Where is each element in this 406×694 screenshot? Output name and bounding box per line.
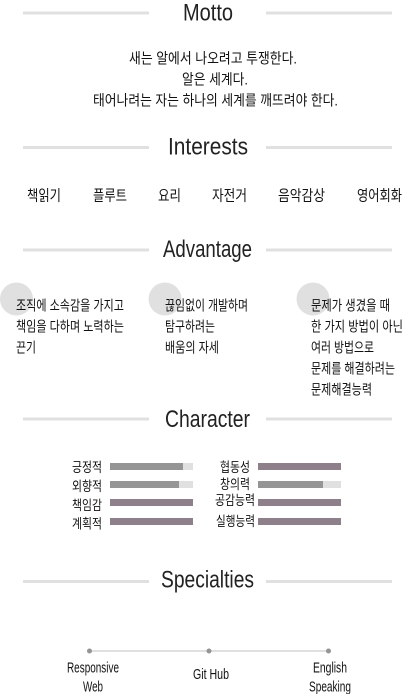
label: Responsive Web: Responsive (67, 660, 119, 676)
advantage item 2: 끊임없이 개발하며 (165, 298, 248, 314)
bar chart: right column: 실행능력 (216, 514, 255, 529)
advantage item 1: 끈기 (16, 340, 36, 356)
bar chart: left column: 책임감 (72, 498, 102, 513)
advantage item 1 (0, 282, 124, 356)
section: character (23, 406, 392, 532)
heading: Specialties: Specialties (161, 566, 254, 594)
list: interests: 플루트 (93, 188, 127, 204)
list: interests: 책읽기 (27, 188, 61, 204)
label: English Speaking: English (313, 660, 347, 676)
advantage item 1: 책임을 다하며 노력하는 (16, 318, 124, 334)
timeline: specialties (87, 648, 331, 654)
section: advantage (0, 236, 403, 398)
bar chart: left column: 긍정적 (72, 460, 102, 475)
advantage item 3: 여러 방법으로 (311, 340, 374, 356)
bar chart: left column: 외향적 (72, 479, 102, 494)
text block: motto quote (93, 50, 338, 110)
list: interests: 요리 (158, 188, 181, 204)
advantage item 1: 조직에 소속감을 가지고 (16, 298, 124, 314)
section: motto (23, 0, 392, 110)
bar chart: right column: 창의력 (220, 477, 250, 492)
text block: motto quote: 알은 세계다. (182, 72, 248, 88)
label: Git Hub: Git Hub (193, 667, 229, 683)
advantage item 3: 문제해결능력 (311, 382, 372, 398)
label: English Speaking (309, 660, 351, 694)
list: interests (27, 188, 402, 204)
text block: motto quote: 태어나려는 자는 하나의 세계를 깨뜨려야 한다. (93, 92, 338, 110)
advantage item 2: 배움의 자세 (165, 340, 219, 356)
heading: Character: Character (165, 406, 250, 433)
advantage item 2 (148, 282, 248, 356)
advantage item 3 (296, 282, 403, 398)
bar chart: left column: 계획적 (72, 516, 102, 532)
list: interests: 자전거 (212, 188, 247, 204)
section: specialties (23, 566, 392, 694)
list: interests: 음악감상 (278, 188, 325, 204)
bar chart: right column: 공감능력 (215, 493, 255, 508)
heading: Interests: Interests (168, 134, 248, 160)
text block: motto quote: 새는 알에서 나오려고 투쟁한다. (129, 50, 297, 68)
heading: Motto: Motto (183, 0, 233, 26)
advantage item 2: 탐구하려는 (165, 318, 215, 334)
bar chart: left column (72, 460, 193, 532)
bar chart: right column: 협동성 (220, 460, 250, 475)
label: Responsive Web (67, 660, 119, 694)
section: interests (23, 134, 402, 204)
heading: Advantage: Advantage (163, 236, 252, 263)
bar chart: right column (215, 460, 341, 529)
